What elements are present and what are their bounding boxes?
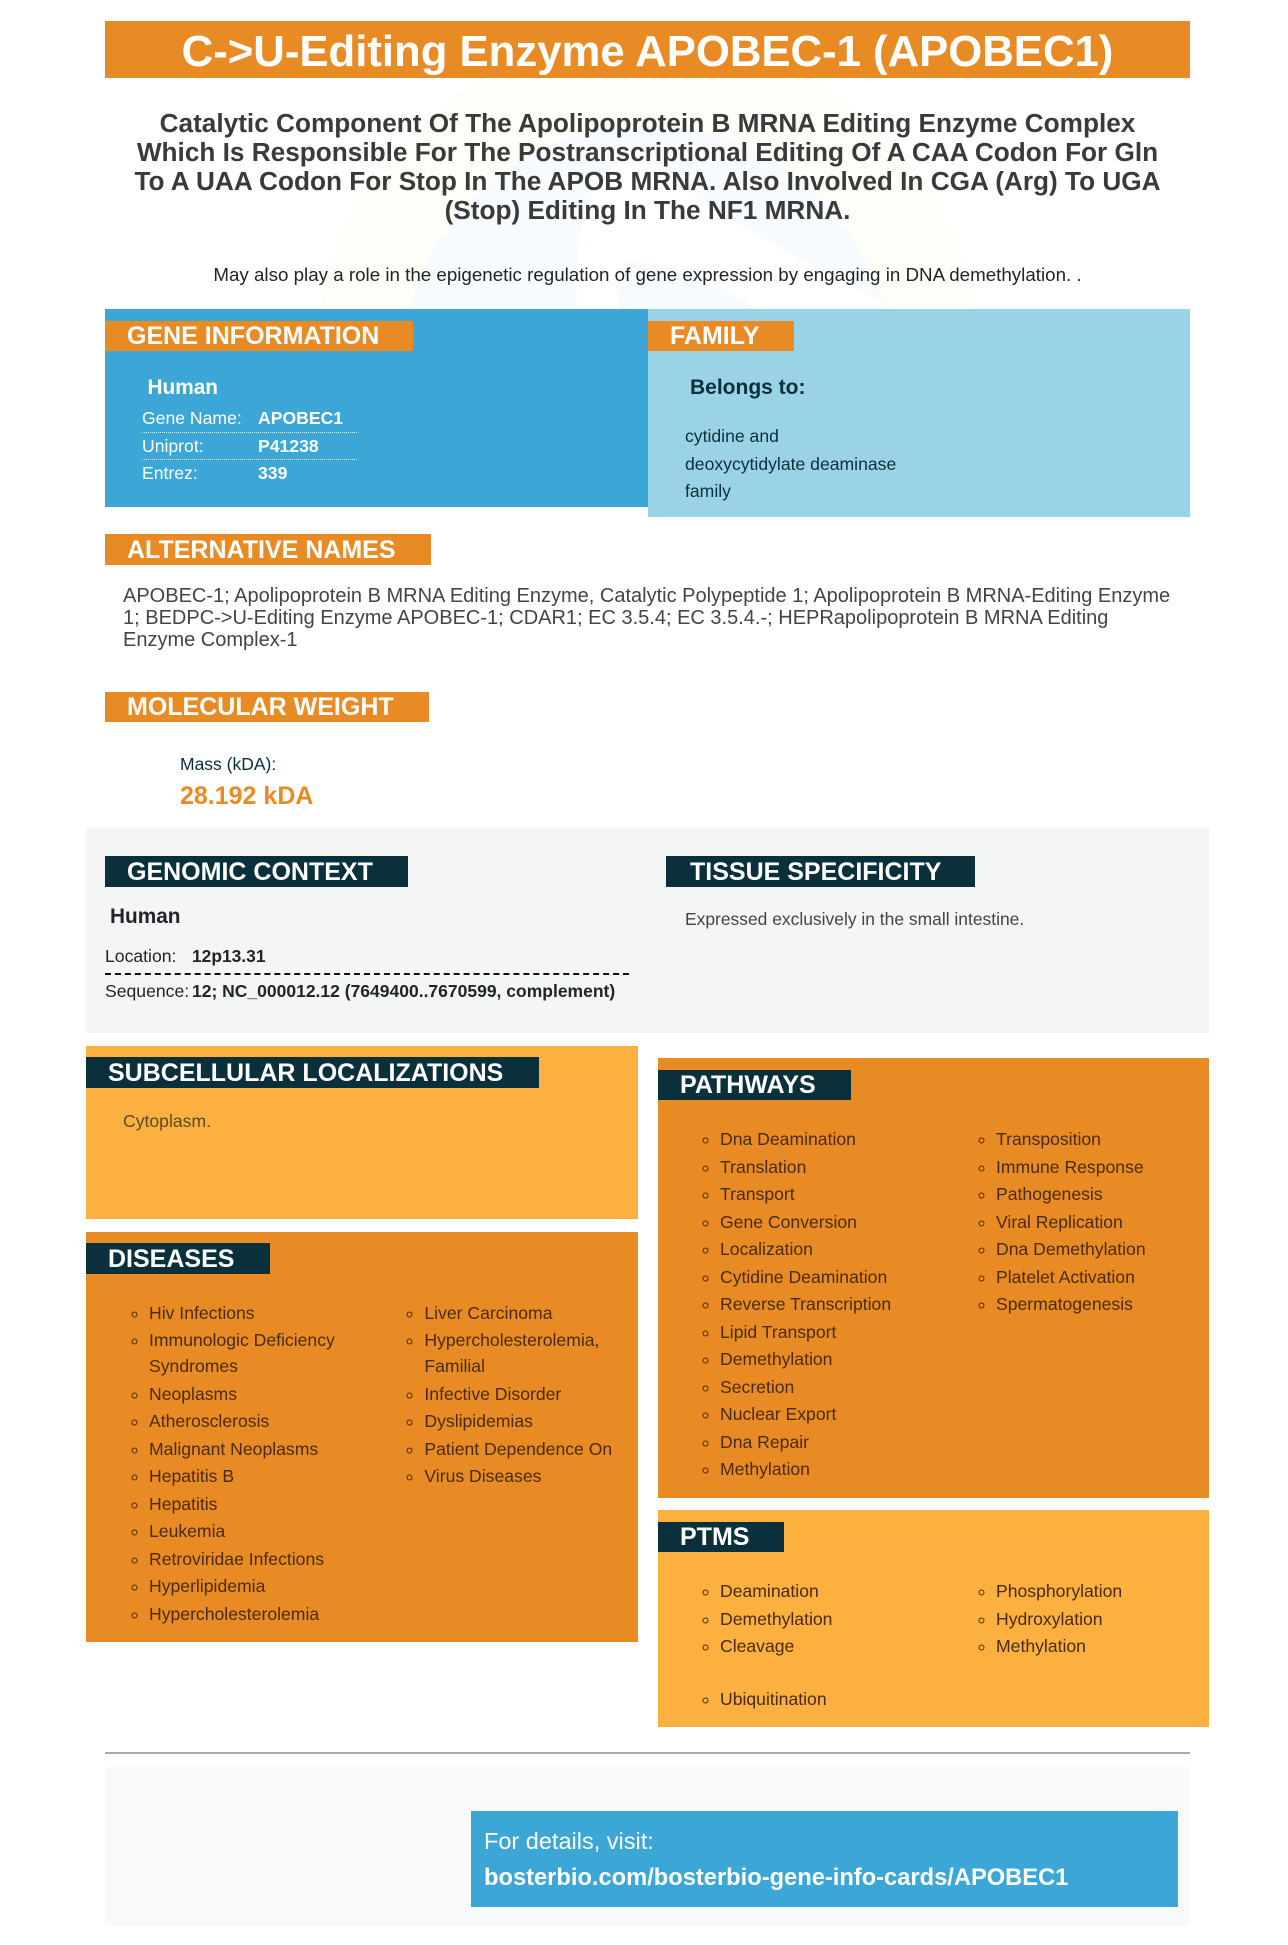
panel: diseases xyxy=(86,1232,638,1642)
disease list column 1: Hepatitis B xyxy=(149,1466,234,1486)
pathway list column 1: Localization xyxy=(720,1239,813,1259)
mass label: Mass (kDA): xyxy=(180,754,276,774)
pathway list column 2: Transposition xyxy=(996,1129,1101,1149)
heading: alternative names: ALTERNATIVE NAMES xyxy=(127,536,396,564)
heading: diseases xyxy=(86,1243,270,1274)
uniprot row: Uniprot: xyxy=(142,436,204,456)
disease list column 2: Virus Diseases xyxy=(424,1466,541,1486)
pathway list column 1 xyxy=(702,1129,891,1479)
panel: pathways xyxy=(658,1058,1209,1498)
heading: subcellular localizations: SUBCELLULAR LOCALIZATIONS xyxy=(108,1059,503,1087)
pathway list column 1: Reverse Transcription xyxy=(720,1294,891,1314)
pathway list column 1: Dna Deamination xyxy=(720,1129,856,1149)
location row xyxy=(105,941,629,975)
panel: footer xyxy=(105,1767,1190,1926)
pathway list column 1: Dna Repair xyxy=(720,1432,809,1452)
ptm list column 1: Deamination xyxy=(720,1581,819,1601)
disease list column 1: Hypercholesterolemia xyxy=(149,1604,319,1624)
heading: ptms: PTMS xyxy=(680,1523,749,1551)
pathway list column 1: Translation xyxy=(720,1156,806,1176)
disease list column 2: Liver Carcinoma xyxy=(424,1302,552,1322)
family text: family xyxy=(685,481,731,501)
subtitle description xyxy=(134,108,1161,225)
heading: diseases: DISEASES xyxy=(108,1245,234,1273)
pathway list column 1: Cytidine Deamination xyxy=(720,1266,887,1286)
mass value: 28.192 kDA xyxy=(180,782,313,810)
pathway list column 1: Lipid Transport xyxy=(720,1322,836,1342)
location row: 12p13.31 xyxy=(192,946,266,966)
disease list column 1: Leukemia xyxy=(149,1521,225,1541)
disease list column 2 xyxy=(406,1302,612,1486)
disease list column 1: Hepatitis xyxy=(149,1494,217,1514)
heading: ptms xyxy=(658,1522,784,1552)
pathway list column 1: Transport xyxy=(720,1184,795,1204)
sequence row xyxy=(105,981,615,1001)
ptm list column 1 xyxy=(702,1581,832,1708)
ptm list column 2: Methylation xyxy=(996,1636,1086,1656)
pathway list column 2: Pathogenesis xyxy=(996,1184,1103,1204)
pathway list column 2: Viral Replication xyxy=(996,1212,1123,1232)
localization text: Cytoplasm. xyxy=(123,1111,211,1131)
disease list column 2: Hypercholesterolemia, Familial xyxy=(424,1330,599,1376)
subtitle description: (Stop) Editing In The NF1 MRNA. xyxy=(445,195,850,225)
disease list column 1 xyxy=(132,1302,335,1624)
gene name row: APOBEC1 xyxy=(258,408,343,428)
background watermark xyxy=(0,78,1288,309)
title: C->U-Editing Enzyme APOBEC-1 (APOBEC1) xyxy=(182,27,1113,76)
disease list column 2: Patient Dependence On xyxy=(424,1438,612,1458)
disease list column 1: Retroviridae Infections xyxy=(149,1548,324,1568)
disease list column 2: Dyslipidemias xyxy=(424,1411,533,1431)
alternative names text: APOBEC-1; Apolipoprotein B MRNA Editing Enzyme, Catalytic Polypeptide 1; Apolipoprotein B MRNA-Editing Enzyme xyxy=(123,585,1170,607)
panel: ptms xyxy=(658,1510,1209,1727)
gene name row: Gene Name: xyxy=(142,408,242,428)
tissue specificity text: Expressed exclusively in the small intestine. xyxy=(685,909,1024,929)
entrez row: 339 xyxy=(258,463,287,483)
entrez row: Entrez: xyxy=(142,463,198,483)
species label: Human xyxy=(110,905,180,928)
disease list column 1: Neoplasms xyxy=(149,1384,237,1404)
heading: pathways xyxy=(658,1070,851,1100)
subtitle description: Catalytic Component Of The Apolipoprotein B MRNA Editing Enzyme Complex xyxy=(160,108,1135,138)
panel: family xyxy=(648,309,1190,517)
disease list column 1: Hyperlipidemia xyxy=(149,1576,265,1596)
subtitle description: To A UAA Codon For Stop In The APOB MRNA. Also Involved In CGA (Arg) To UGA xyxy=(134,166,1161,196)
pathway list column 1: Gene Conversion xyxy=(720,1212,857,1232)
alternative names text: 1; BEDPC->U-Editing Enzyme APOBEC-1; CDAR1; EC 3.5.4; EC 3.5.4.-; HEPRapolipoprotein B MRNA Editing xyxy=(123,607,1108,629)
pathway list column 2 xyxy=(978,1129,1146,1314)
disease list column 2: Infective Disorder xyxy=(424,1384,561,1404)
pathway list column 2: Dna Demethylation xyxy=(996,1239,1146,1259)
subtitle description: Which Is Responsible For The Postranscriptional Editing Of A CAA Codon For Gln xyxy=(137,137,1158,167)
pathway list column 1: Demethylation xyxy=(720,1349,832,1369)
gene name row xyxy=(142,403,356,433)
ptm list column 2: Hydroxylation xyxy=(996,1608,1103,1628)
pathway list column 2: Immune Response xyxy=(996,1156,1144,1176)
panel: genomic context and tissue specificity xyxy=(86,827,1209,1033)
heading: tissue specificity: TISSUE SPECIFICITY xyxy=(690,858,941,886)
sequence row: Sequence: xyxy=(105,981,189,1001)
family text xyxy=(685,426,896,501)
pathway list column 1: Nuclear Export xyxy=(720,1404,836,1424)
pathway list column 2: Spermatogenesis xyxy=(996,1294,1133,1314)
divider xyxy=(105,1752,1190,1754)
heading: family xyxy=(648,321,794,351)
ptm list column 2 xyxy=(978,1581,1122,1656)
disease list column 1: Malignant Neoplasms xyxy=(149,1438,318,1458)
disease list column 1: Hiv Infections xyxy=(149,1302,255,1322)
pathway list column 1: Methylation xyxy=(720,1459,810,1479)
uniprot row xyxy=(142,431,356,460)
panel: genomic context and tissue specificity: 12; NC_000012.12 (7649400..7670599, complement) xyxy=(192,981,615,1001)
ptm list column 1: Cleavage xyxy=(720,1636,794,1656)
callout: details link xyxy=(471,1811,1178,1907)
alternative names text xyxy=(123,585,1170,651)
ptm list column 1: Demethylation xyxy=(720,1608,832,1628)
family text: deoxycytidylate deaminase xyxy=(685,454,896,474)
heading: gene information: GENE INFORMATION xyxy=(127,322,379,350)
secondary description: May also play a role in the epigenetic regulation of gene expression by engaging in DNA demethylation. . xyxy=(213,264,1082,285)
alternative names text: Enzyme Complex-1 xyxy=(123,629,298,651)
panel: subcellular localizations xyxy=(86,1046,638,1219)
uniprot row: P41238 xyxy=(258,436,319,456)
heading: pathways: PATHWAYS xyxy=(680,1071,816,1099)
heading: family: FAMILY xyxy=(670,322,759,350)
species label: Human xyxy=(148,376,218,399)
visit label: For details, visit: xyxy=(484,1828,654,1854)
disease list column 1: Atherosclerosis xyxy=(149,1411,269,1431)
ptm list column 1: Ubiquitination xyxy=(720,1688,827,1708)
disease list column 1: Immunologic Deficiency Syndromes xyxy=(149,1330,335,1376)
panel: gene information xyxy=(105,309,648,507)
heading: genomic context: GENOMIC CONTEXT xyxy=(127,858,373,886)
pathway list column 2: Platelet Activation xyxy=(996,1266,1135,1286)
location row: Location: xyxy=(105,946,176,966)
belongs to label: Belongs to: xyxy=(690,376,806,399)
heading: molecular weight: MOLECULAR WEIGHT xyxy=(127,693,394,721)
pathway list column 1: Secretion xyxy=(720,1376,794,1396)
family text: cytidine and xyxy=(685,426,779,446)
url: bosterbio.com/bosterbio-gene-info-cards/APOBEC1 xyxy=(484,1865,1068,1891)
entrez row xyxy=(142,463,287,483)
ptm list column 2: Phosphorylation xyxy=(996,1581,1122,1601)
